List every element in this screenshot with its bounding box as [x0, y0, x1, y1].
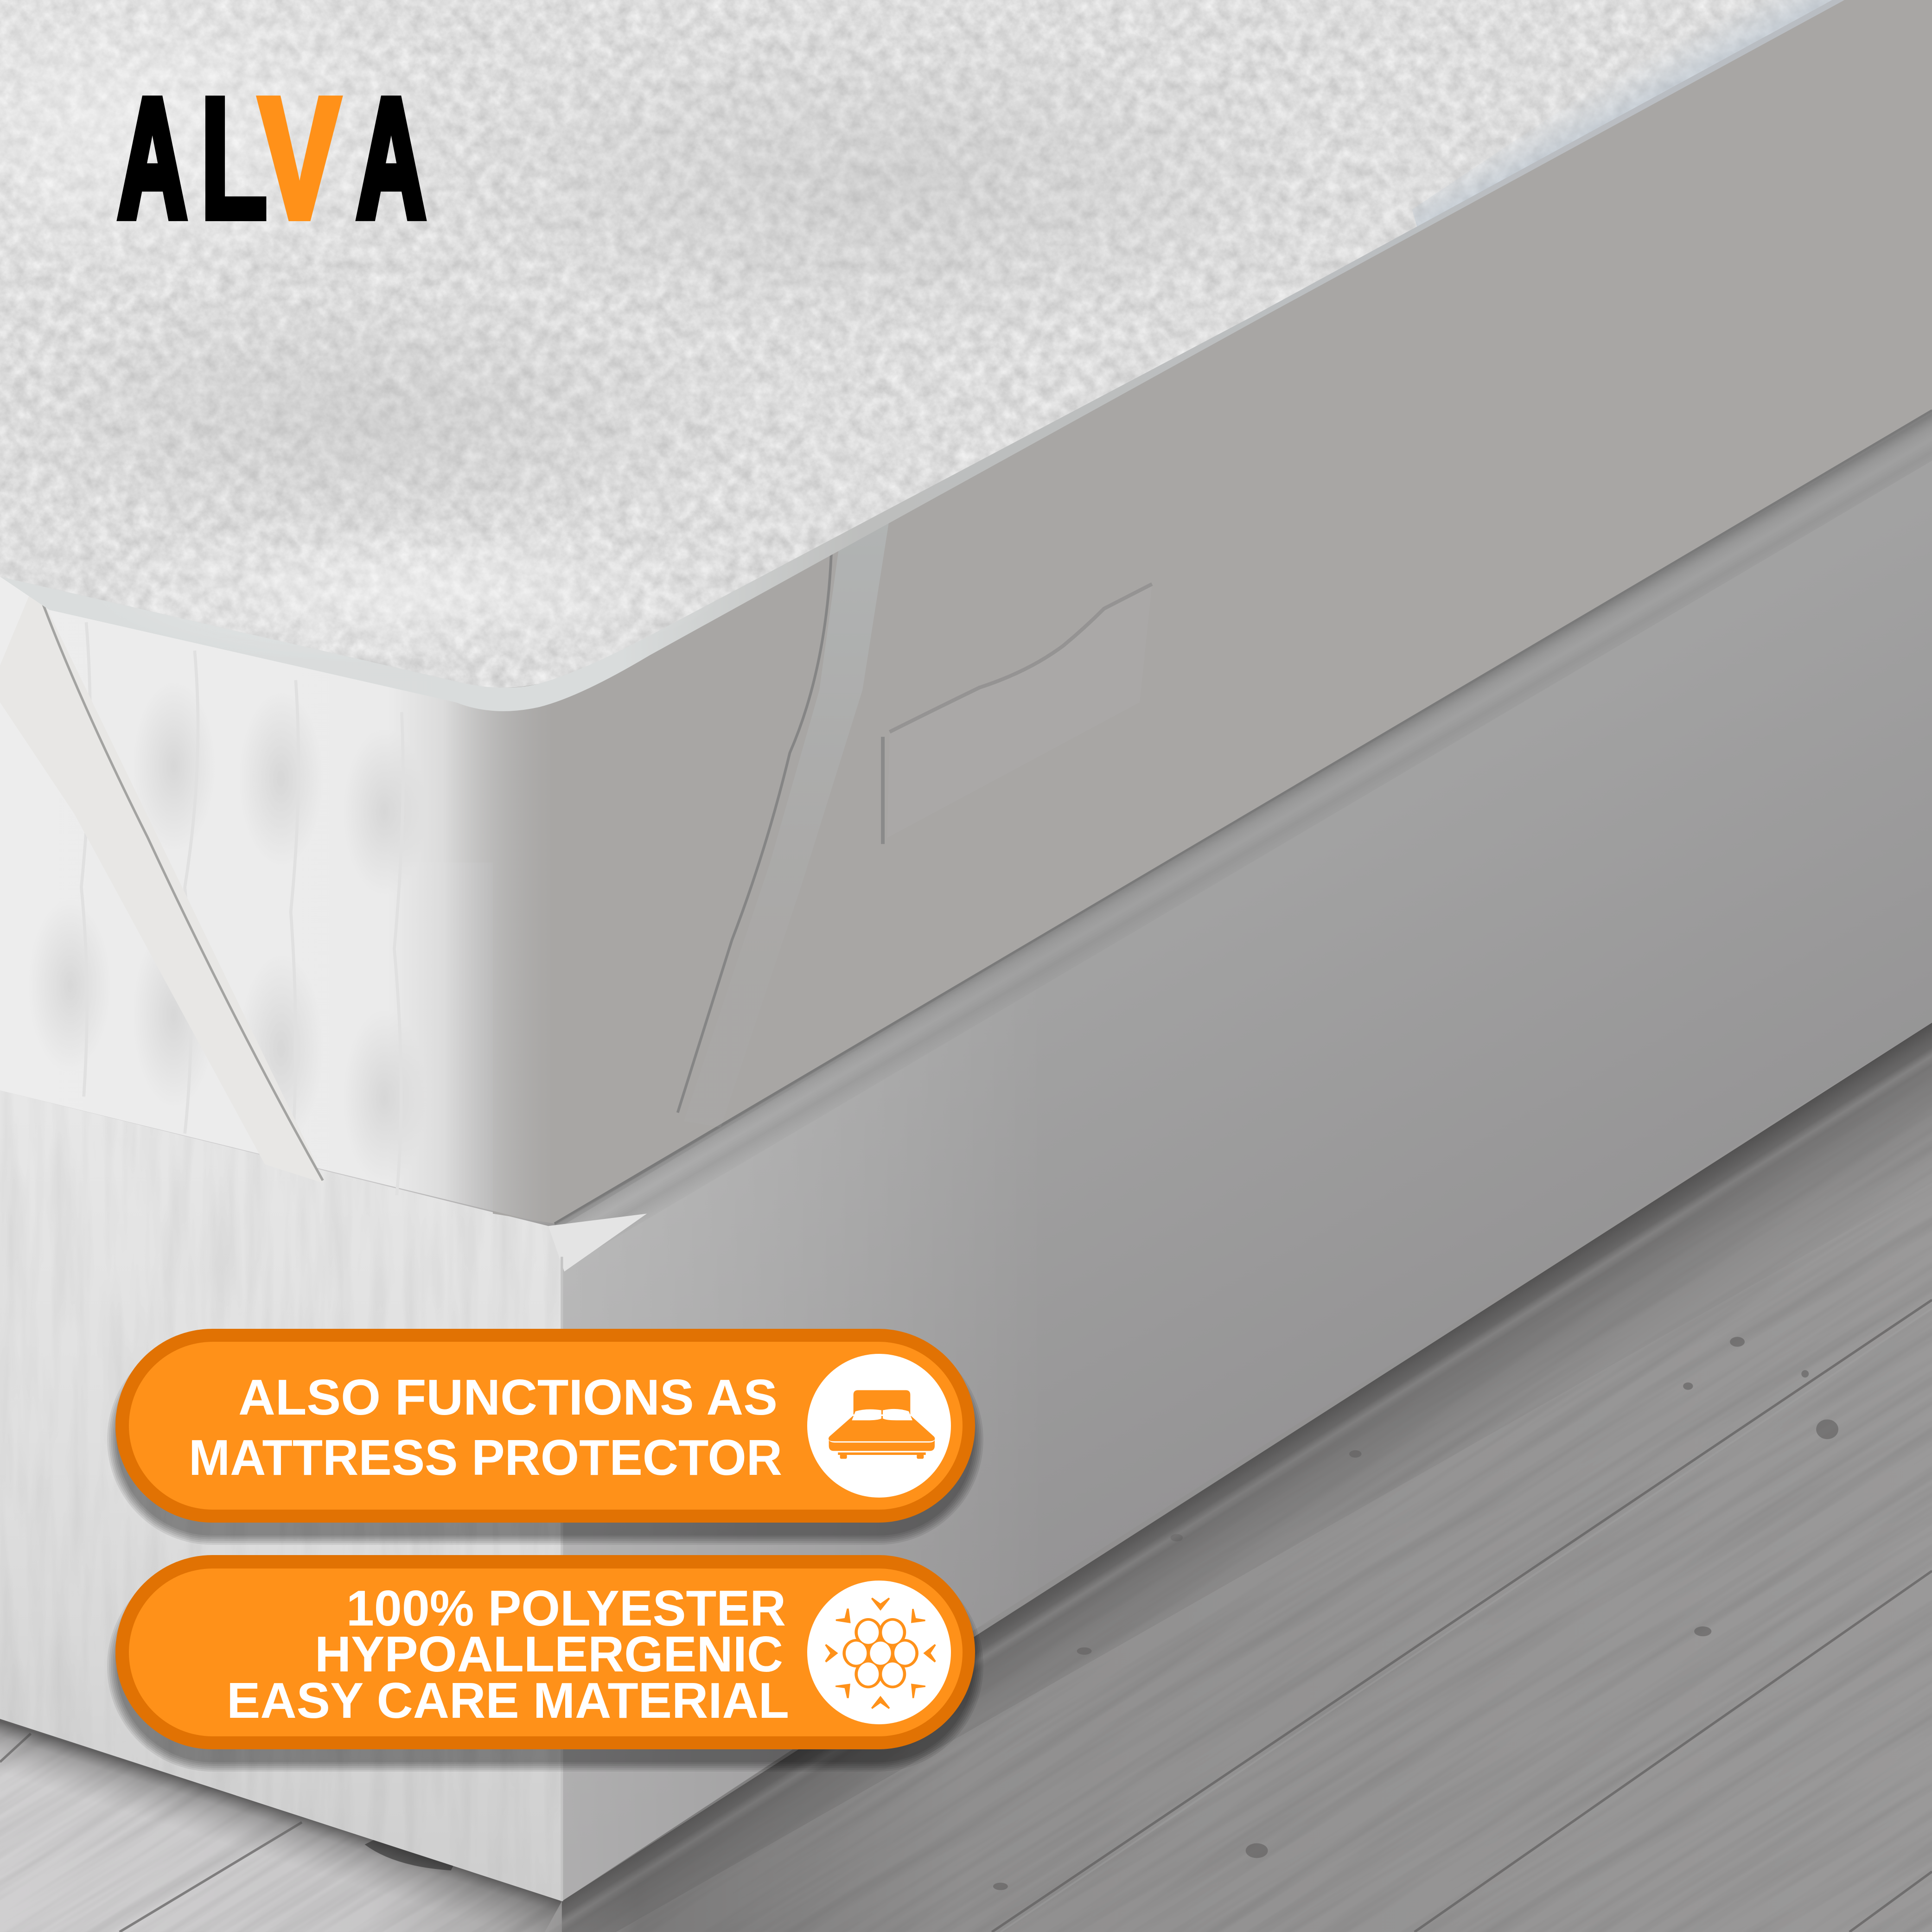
base right face — [555, 410, 1932, 1901]
pill text — [227, 1580, 789, 1729]
base left face — [0, 1090, 647, 1901]
pill text: MATTRESS PROTECTOR — [189, 1429, 782, 1486]
pill text: EASY CARE MATERIAL — [227, 1672, 789, 1729]
shadows under the bed — [562, 1023, 1932, 1932]
strap: left elastic band — [0, 583, 323, 1183]
logo: ALVA: A — [118, 65, 186, 252]
pill shadow — [107, 1561, 983, 1772]
pill background — [115, 1329, 975, 1523]
pill text: 100% POLYESTER — [346, 1580, 786, 1637]
pill text: ALSO FUNCTIONS AS — [238, 1369, 778, 1426]
fleece top surface — [0, 0, 1832, 688]
logo: ALVA: A — [357, 65, 425, 252]
pill: mattress protector — [107, 1329, 983, 1545]
tuft shadows — [28, 680, 426, 1186]
strap: right elastic band — [684, 517, 890, 1128]
pill text — [189, 1369, 782, 1486]
pill shadow — [107, 1334, 983, 1545]
pill: polyester hypoallergenic — [107, 1555, 983, 1772]
pill text: HYPOALLERGENIC — [315, 1626, 783, 1683]
icon: fibre cluster with arrows — [807, 1581, 951, 1724]
icon: bed — [807, 1354, 951, 1498]
floor planks — [0, 862, 1932, 1932]
logo: ALVA: L — [199, 61, 268, 256]
mattress front corner with tufts — [0, 577, 555, 1226]
pill background — [115, 1555, 975, 1749]
logo: ALVA: V — [260, 63, 340, 253]
logo: ALVA — [118, 61, 425, 256]
mattress side panel — [493, 0, 1932, 1224]
fleece piping edge — [0, 0, 1844, 711]
handle flap — [887, 584, 1152, 838]
